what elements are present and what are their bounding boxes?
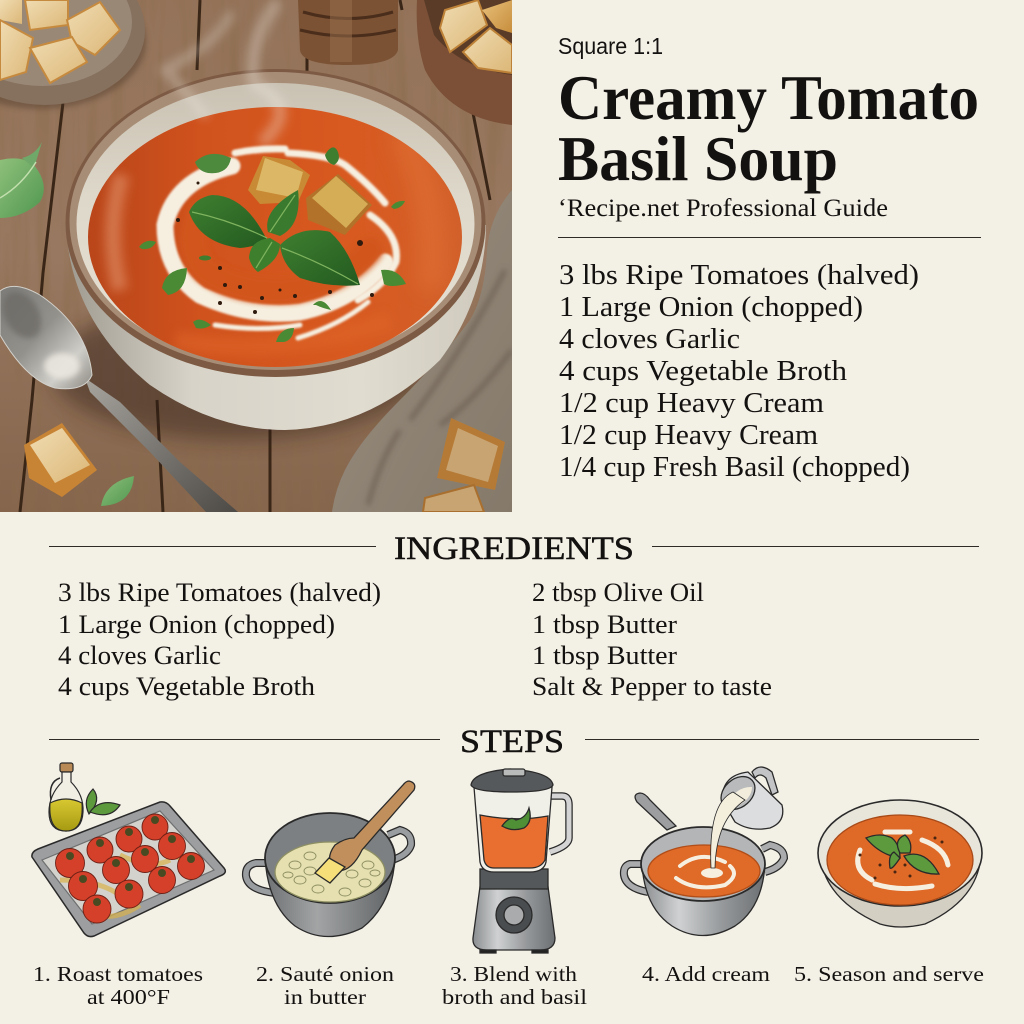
cream stream <box>711 792 745 868</box>
pot handles <box>624 845 784 892</box>
basil leaf left <box>0 142 44 218</box>
inner wall <box>76 83 474 365</box>
blender handle <box>548 796 569 852</box>
ingredient list top right: 1/4 cup Fresh Basil (chopped) <box>559 452 910 483</box>
soup <box>827 815 973 905</box>
ingredients column left <box>58 578 381 701</box>
title <box>558 63 979 194</box>
ingredients column right: 1 tbsp Butter <box>532 641 677 670</box>
pot rim <box>641 827 765 901</box>
icon: pot with cream being poured <box>624 767 784 936</box>
step 2 caption: in butter <box>284 985 366 1009</box>
cream swirl <box>165 149 396 338</box>
blended soup <box>480 815 548 868</box>
wooden spoon <box>329 781 415 871</box>
cream swirl <box>858 832 948 889</box>
ingredients column right <box>532 578 772 701</box>
baking tray <box>32 802 225 937</box>
step 1 caption: 1. Roast tomatoes <box>33 962 203 986</box>
ingredients column right: 2 tbsp Olive Oil <box>532 578 704 607</box>
bowl body <box>820 855 981 927</box>
bowl <box>66 69 486 430</box>
bowl shadow <box>50 300 420 440</box>
header divider <box>558 237 981 238</box>
basil <box>866 835 939 874</box>
steam <box>165 5 280 140</box>
pepper mill <box>298 0 398 65</box>
step 4 caption: 4. Add cream <box>642 962 770 986</box>
ingredients column right: 1 tbsp Butter <box>532 610 677 639</box>
sautéed onions <box>275 842 385 902</box>
ingredient list top right: 1/2 cup Heavy Cream <box>559 420 818 451</box>
crouton on napkin <box>437 418 505 490</box>
tomato soup <box>88 107 462 367</box>
ingredient list top right: 1 Large Onion (chopped) <box>559 292 863 323</box>
crouton bottom <box>423 485 484 512</box>
ingredients column left: 1 Large Onion (chopped) <box>58 610 335 639</box>
pot handles <box>246 830 411 893</box>
ingredient list top right: 4 cups Vegetable Broth <box>559 356 847 387</box>
icon: roasting tray with tomatoes, oil and basil <box>32 763 225 937</box>
ingredient list top right <box>559 260 919 483</box>
ingredients column left: 3 lbs Ripe Tomatoes (halved) <box>58 578 381 607</box>
pot body <box>265 858 395 937</box>
step 5 caption: 5. Season and serve <box>794 962 984 986</box>
icon: basil <box>86 789 120 815</box>
step 3 caption: broth and basil <box>442 985 587 1009</box>
title: Basil Soup <box>558 124 838 194</box>
ingredients column left: 4 cups Vegetable Broth <box>58 672 315 701</box>
subtitle: ‘Recipe.net Professional Guide <box>558 195 888 222</box>
pot rim <box>265 813 395 903</box>
wooden table <box>0 0 512 512</box>
ingredients column left: 4 cloves Garlic <box>58 641 221 670</box>
blender knob <box>496 897 532 933</box>
basil sprig <box>189 190 360 286</box>
tomato stems <box>66 816 195 906</box>
title: Creamy Tomato <box>558 63 979 133</box>
step 3 caption <box>442 962 587 1009</box>
step 3 caption: 3. Blend with <box>450 962 577 986</box>
step 2 caption: 2. Sauté onion <box>256 962 394 986</box>
blender base <box>473 872 555 950</box>
step 1 caption <box>33 962 203 1009</box>
crouton plate top left <box>0 0 146 109</box>
small basil leaf <box>101 476 134 506</box>
pot body <box>642 865 765 936</box>
pepper specks and herb flakes <box>139 147 406 342</box>
icon: olive oil bottle <box>49 763 83 831</box>
butter <box>315 858 345 883</box>
ladle handle <box>635 793 676 830</box>
icon: pot with onions, butter and wooden spoon <box>246 781 415 937</box>
panel: hero photo of soup on wooden table <box>0 0 512 512</box>
soup highlights <box>113 130 432 347</box>
ingredient list top right: 1/2 cup Heavy Cream <box>559 388 824 419</box>
ingredients heading: INGREDIENTS <box>394 531 634 567</box>
bowl rim <box>818 800 982 906</box>
blender jar <box>474 787 552 872</box>
basil garnish <box>502 808 530 830</box>
blender feet <box>480 950 548 953</box>
cream jug <box>715 767 783 829</box>
croutons in soup <box>248 156 372 235</box>
ingredient list top right: 3 lbs Ripe Tomatoes (halved) <box>559 260 919 291</box>
pepper <box>858 836 944 880</box>
crouton bowl top right <box>417 0 512 125</box>
napkin <box>332 190 512 512</box>
ingredient list top right: 4 cloves Garlic <box>559 324 740 355</box>
blender lid <box>471 769 553 792</box>
format label: Square 1:1 <box>558 33 663 59</box>
icon: blender with soup <box>471 769 569 953</box>
step 1 caption: at 400°F <box>87 985 170 1009</box>
bowl rim <box>66 69 486 377</box>
steps heading: STEPS <box>460 724 564 760</box>
tomatoes <box>56 814 204 923</box>
soup with cream swirl <box>648 845 760 897</box>
crouton on table left <box>24 423 97 497</box>
icon: finished bowl of soup with basil <box>818 800 982 927</box>
step 2 caption <box>256 962 394 1009</box>
spoon <box>0 285 238 512</box>
ingredients column right: Salt & Pepper to taste <box>532 672 772 701</box>
